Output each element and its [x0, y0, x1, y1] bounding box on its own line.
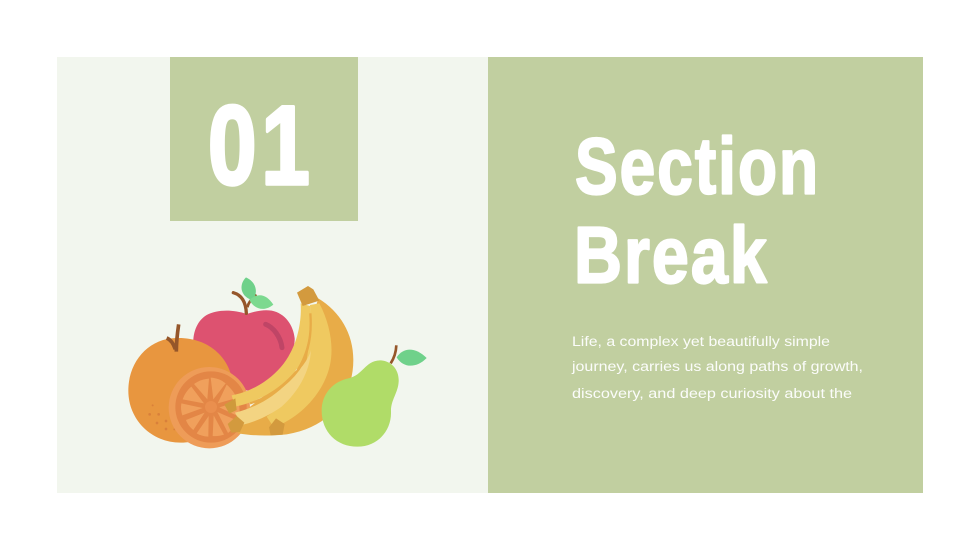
title [574, 122, 820, 300]
middle banana [267, 303, 332, 427]
title: Break [574, 210, 769, 300]
title: Section [575, 122, 820, 211]
body text [571, 334, 863, 402]
fruit illustration [128, 277, 427, 448]
banana stems [297, 286, 319, 306]
body text: journey, carries us along paths of growth, [571, 359, 863, 375]
number badge [170, 57, 358, 221]
banana bunch [224, 286, 353, 435]
back banana [233, 298, 353, 435]
body text: discovery, and deep curiosity about the [572, 386, 852, 402]
apple [193, 277, 295, 391]
orange slice [169, 367, 250, 448]
panel: left light background [57, 57, 488, 493]
pear [322, 345, 427, 447]
top banana [232, 303, 311, 407]
light band [235, 350, 311, 425]
orange [128, 324, 233, 443]
panel: right green background [488, 57, 923, 493]
body text: Life, a complex yet beautifully simple [572, 334, 830, 350]
section number: 01 [208, 84, 315, 209]
